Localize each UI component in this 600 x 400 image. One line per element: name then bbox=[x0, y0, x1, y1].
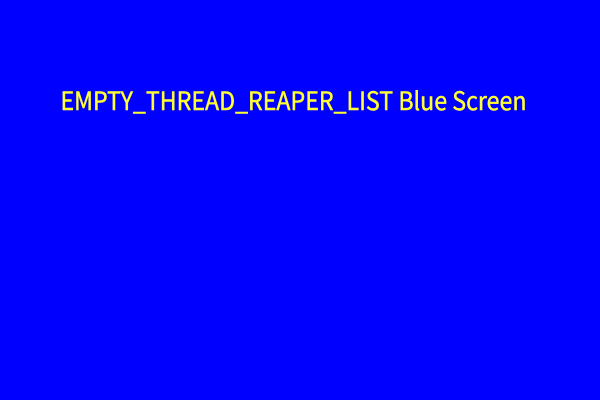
title: EMPTY_THREAD_REAPER_LIST Blue Screen bbox=[60, 82, 526, 118]
